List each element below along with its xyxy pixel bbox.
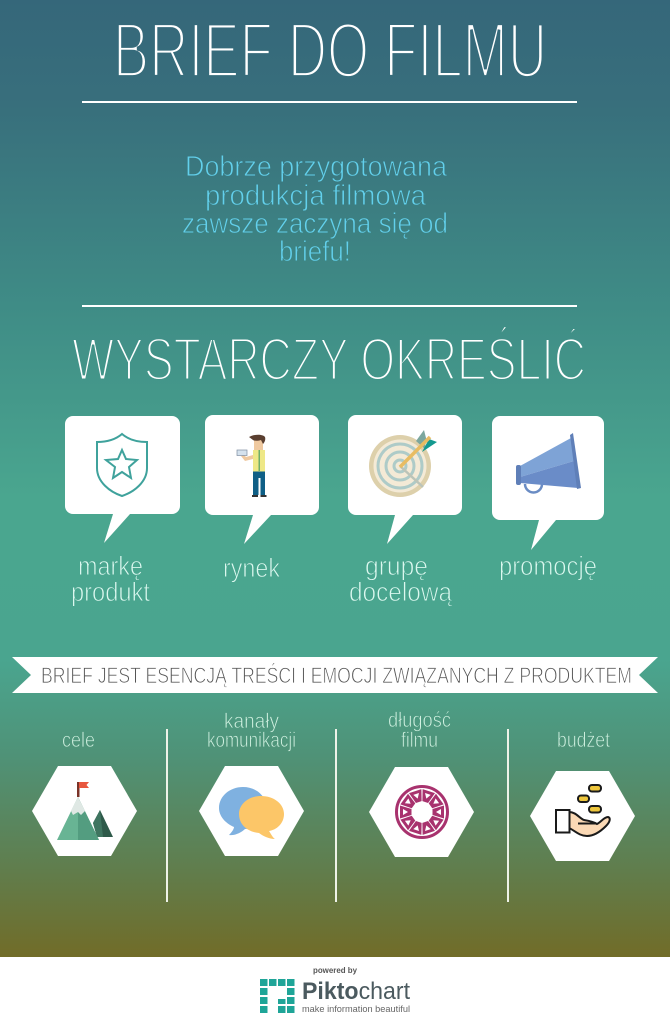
footer: [0, 957, 670, 1024]
icon: hand with coins: [556, 785, 610, 836]
intro text: briefu!: [279, 236, 351, 268]
icon: shield with star: [97, 434, 147, 496]
panel: cele: [32, 729, 137, 856]
icon: film reel: [393, 784, 451, 840]
label: grupę docelową: [349, 551, 453, 607]
icon: chat bubbles: [219, 787, 284, 839]
panel: grupa docelowa: [348, 415, 462, 607]
hexagon 4: [530, 771, 635, 861]
label: długość filmu: długość: [388, 709, 451, 732]
hexagon 3: [369, 767, 474, 857]
hexagon 1: [32, 766, 137, 856]
speech bubble 4: [492, 416, 604, 550]
panel: kanały komunikacji: [199, 710, 304, 856]
panel: rynek: [205, 415, 319, 583]
ribbon banner: [12, 657, 658, 693]
label: markę produkt: markę: [78, 551, 143, 581]
label: cele: cele: [62, 729, 95, 752]
intro text: Dobrze przygotowana: [185, 151, 448, 183]
label: markę produkt: produkt: [71, 577, 150, 607]
label: budżet: budżet: [557, 729, 610, 752]
label: promocję: promocję: [499, 551, 597, 581]
icon: man with card: [237, 435, 266, 497]
panel: promocja: [492, 416, 604, 581]
speech bubble 2: [205, 415, 319, 544]
intro text: produkcja filmowa: [205, 180, 427, 212]
speech bubble 1: [65, 416, 180, 543]
icon: megaphone: [516, 433, 581, 492]
intro text: [182, 151, 448, 268]
icon: mountains with flag: [57, 782, 113, 840]
panel: długość filmu: [369, 709, 474, 857]
intro text: zawsze zaczyna się od: [182, 208, 448, 240]
powered by: powered by: [313, 965, 357, 975]
label: markę produkt: [71, 551, 150, 607]
panel: budżet: [530, 729, 635, 861]
speech bubble 3: [348, 415, 462, 544]
label: kanały komunikacji: kanały: [224, 710, 279, 733]
logo mark: [260, 979, 294, 1013]
tagline: make information beautiful: [302, 1004, 410, 1015]
label: rynek: rynek: [223, 553, 280, 583]
logo wordmark: Piktochart: [302, 978, 410, 1005]
icon: target with arrow: [369, 430, 437, 497]
label: grupę docelową: grupę: [365, 551, 428, 581]
label: kanały komunikacji: [207, 710, 296, 752]
label: grupę docelową: docelową: [349, 577, 453, 607]
label: długość filmu: [388, 709, 451, 752]
label: kanały komunikacji: komunikacji: [207, 729, 296, 752]
hexagon 2: [199, 766, 304, 856]
panel: marka produkt: [65, 416, 180, 607]
label: długość filmu: filmu: [401, 729, 438, 752]
